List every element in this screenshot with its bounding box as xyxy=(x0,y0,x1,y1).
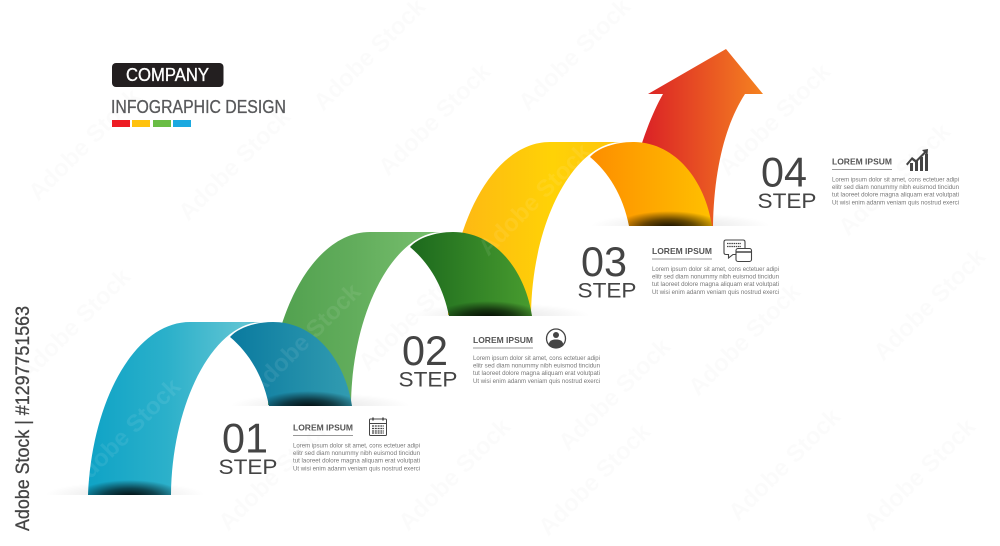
arch: step 02 green xyxy=(268,232,544,405)
step 01 body text xyxy=(293,442,420,472)
colour key bars xyxy=(112,120,191,127)
step 04 label: STEP xyxy=(758,189,816,213)
step 03 number: 03 xyxy=(581,238,627,285)
step 03 body text: Ut wisi enim adanm veniam quis nostrud exerci xyxy=(652,289,779,296)
header: company block xyxy=(111,63,286,127)
watermark pattern: Adobe Stock xyxy=(173,103,297,226)
step 01 number: 01 xyxy=(222,414,268,462)
step 01 xyxy=(218,414,420,479)
step 02 body text: Ut wisi enim adanm veniam quis nostrud exerci xyxy=(473,378,600,385)
step 02 xyxy=(398,327,600,392)
watermark pattern: Adobe Stock xyxy=(393,413,517,536)
step 04 title: LOREM IPSUM xyxy=(832,156,892,166)
watermark pattern: Adobe Stock xyxy=(23,83,147,206)
watermark pattern: Adobe Stock xyxy=(683,278,807,401)
step 02 body text xyxy=(473,355,600,385)
watermark pattern: Adobe Stock xyxy=(858,413,982,536)
step 01 body text: Ut wisi enim adanm veniam quis nostrud exerci xyxy=(293,465,420,472)
watermark pattern: Adobe Stock xyxy=(353,253,477,376)
step 02 body text: elitr sed diam nonummy nibh euismod tincidun xyxy=(473,362,600,370)
step 03 body text: Lorem ipsum dolor sit amet, cons ectetuer adipi xyxy=(652,266,779,273)
watermark pattern: Adobe Stock xyxy=(533,418,657,541)
watermark pattern: Adobe Stock xyxy=(723,403,847,526)
step 04 body text: Lorem ipsum dolor sit amet, cons ectetuer adipi xyxy=(832,176,959,183)
arch: step 03 yellow xyxy=(448,142,724,315)
step 02 number: 02 xyxy=(402,327,448,374)
company badge: COMPANY xyxy=(126,65,209,85)
watermark over arches: Adobe Stock xyxy=(243,278,367,401)
watermark pattern: Adobe Stock xyxy=(833,118,957,241)
icon: calendar xyxy=(370,418,386,436)
step 03 body text xyxy=(652,266,779,296)
arrow: red rising head xyxy=(640,49,763,226)
step 03 label: STEP xyxy=(578,278,636,302)
step 03 body text: tut laoreet dolore magna aliquam erat volutpati xyxy=(652,281,779,288)
step 02 title: LOREM IPSUM xyxy=(473,335,533,345)
ground shadows xyxy=(45,213,770,508)
step 04 body text xyxy=(832,176,959,206)
step 03 body text: elitr sed diam nonummy nibh euismod tincidun xyxy=(652,274,779,280)
watermark pattern: Adobe Stock xyxy=(213,413,337,536)
step 04 body text: Ut wisi enim adanm veniam quis nostrud exerci xyxy=(832,199,959,206)
watermark pattern: Adobe Stock xyxy=(553,333,677,456)
step 04 xyxy=(758,148,959,213)
subtitle: INFOGRAPHIC DESIGN xyxy=(111,97,286,117)
watermark over arches: Adobe Stock xyxy=(473,138,597,261)
icon: growth chart xyxy=(906,149,928,171)
watermark pattern: Adobe Stock xyxy=(13,263,137,386)
company badge xyxy=(112,63,224,87)
step 02 body text: Lorem ipsum dolor sit amet, cons ectetuer adipi xyxy=(473,355,600,362)
arch: step 01 blue xyxy=(88,322,352,495)
step 01 title: LOREM IPSUM xyxy=(293,422,353,432)
vertical stock label: Adobe Stock | #1297751563 xyxy=(13,306,34,531)
watermark pattern: Adobe Stock xyxy=(713,58,837,181)
watermark pattern: Adobe Stock xyxy=(868,243,992,366)
watermark over arches: Adobe Stock xyxy=(63,373,187,496)
step 01 body text: elitr sed diam nonummy nibh euismod tincidun xyxy=(293,450,420,457)
step 04 number: 04 xyxy=(761,148,807,196)
step 02 label: STEP xyxy=(398,368,458,392)
icon: chat bubbles xyxy=(724,240,752,262)
step 04 body text: elitr sed diam nonummy nibh euismod tincidun xyxy=(832,184,959,191)
step 01 label: STEP xyxy=(218,455,278,479)
step 03 xyxy=(578,238,779,302)
step 01 body text: tut laoreet dolore magna aliquam erat volutpati xyxy=(293,458,420,465)
step 01 body text: Lorem ipsum dolor sit amet, cons ectetuer adipi xyxy=(293,442,420,449)
watermark over arches xyxy=(63,138,597,496)
step 03 title: LOREM IPSUM xyxy=(652,246,712,256)
watermark pattern: Adobe Stock xyxy=(373,58,497,181)
step 02 body text: tut laoreet dolore magna aliquam erat volutpati xyxy=(473,370,600,377)
icon: businessman in circle xyxy=(546,329,566,348)
step 04 body text: tut laoreet dolore magna aliquam erat volutpati xyxy=(832,192,959,199)
